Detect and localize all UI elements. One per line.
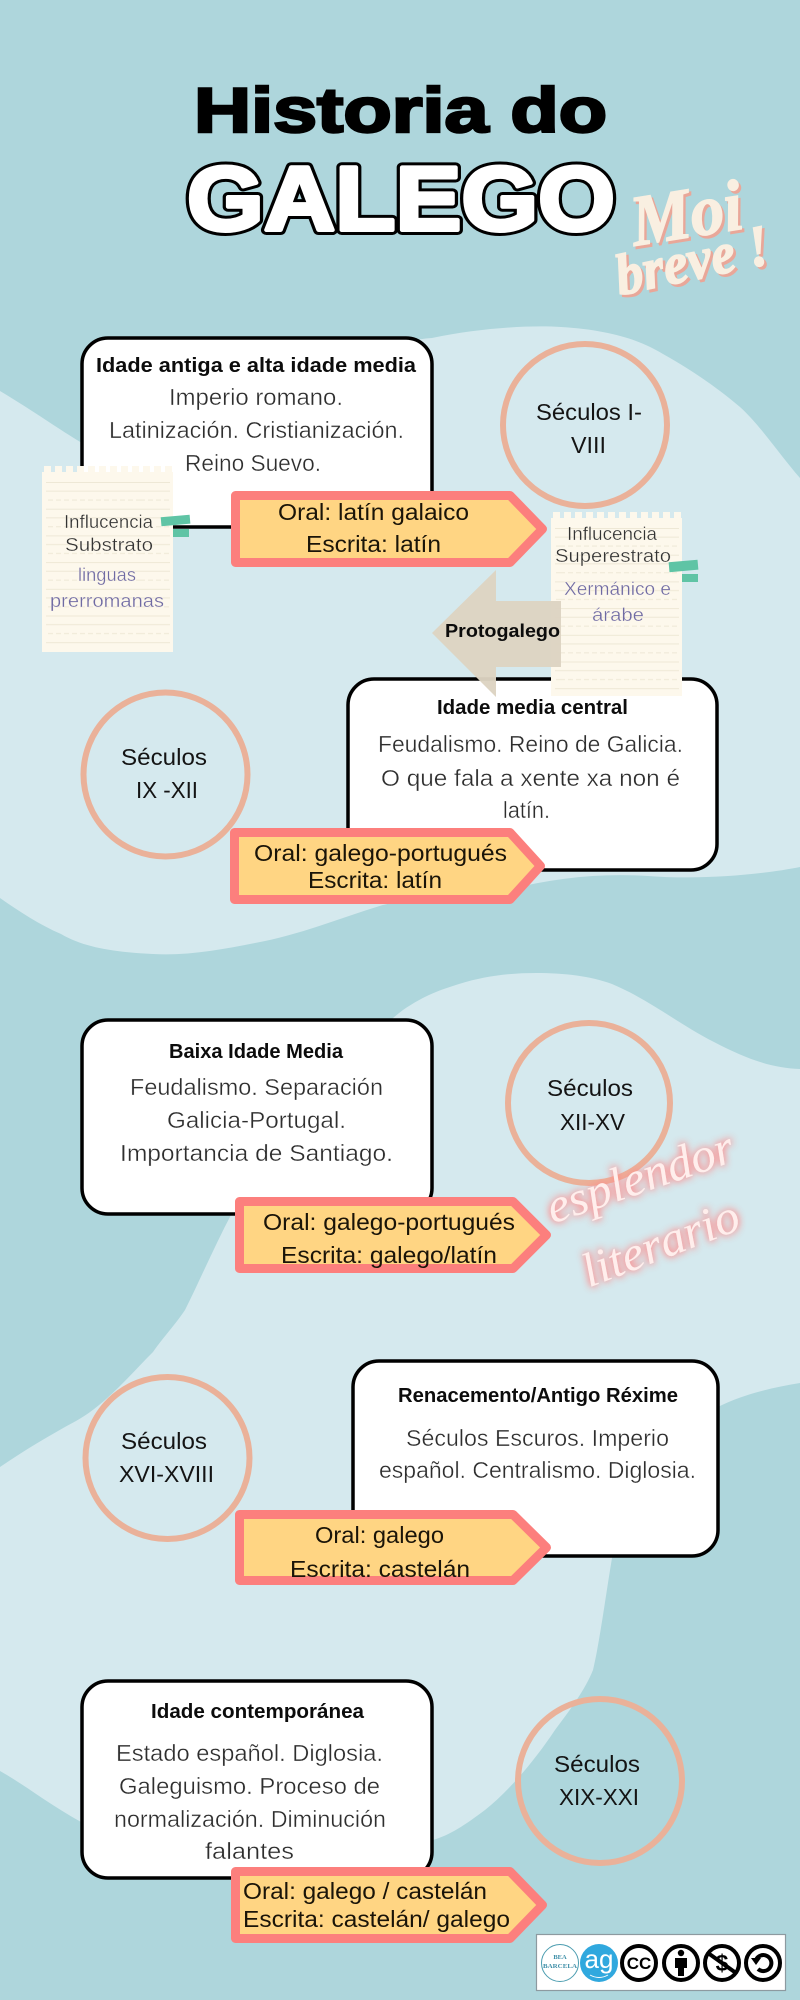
ring (518, 1699, 682, 1863)
ruled lines (555, 528, 679, 694)
arrow: protogalego (432, 570, 561, 697)
icon: Bea Barcelá (542, 1944, 578, 1982)
panel: renacemento (353, 1361, 718, 1556)
arrow text: Oral: galego (315, 1522, 444, 1548)
background blob: lower (0, 973, 800, 1860)
century label: Séculos (554, 1751, 640, 1777)
icon: non commercial: $ (716, 1950, 729, 1976)
icon: Bea Barcelá: BEA (553, 1954, 567, 1961)
torn top edge (553, 512, 682, 520)
body text: falantes (205, 1838, 294, 1864)
body text: Reino Suevo. (185, 450, 321, 476)
arrow: galego / castelán (236, 1872, 542, 1938)
tagline shadow: breve: breve ! (611, 214, 778, 310)
note text: Influcencia (567, 524, 658, 544)
ruled lines (46, 482, 170, 650)
circle: séculos IX-XII (84, 692, 248, 856)
body text: latín. (503, 797, 550, 823)
circle: séculos XIX-XXI (518, 1699, 682, 1863)
title line: GALEGO outline: GALEGO (187, 149, 615, 250)
icon: attribution (664, 1946, 698, 1980)
body text: español. Centralismo. Diglosia. (379, 1457, 696, 1483)
icon: share alike (746, 1946, 780, 1980)
tape (669, 560, 698, 582)
torn top edge (44, 466, 173, 474)
note detail: Xermánico e (564, 579, 671, 599)
century label: XIX-XXI (559, 1784, 639, 1810)
circle: séculos XII-XV (508, 1023, 670, 1183)
body text: Imperio romano. (169, 384, 343, 410)
neon word: literario: literario (574, 1189, 747, 1298)
heading: Baixa Idade Media (169, 1041, 344, 1063)
century label: Séculos (121, 744, 207, 770)
century label: XII-XV (560, 1109, 626, 1135)
body text: Feudalismo. Reino de Galicia. (378, 731, 683, 757)
heading: Idade antiga e alta idade media (96, 355, 417, 377)
arrow text: Escrita: latín (306, 531, 441, 557)
century label: XVI-XVIII (119, 1461, 214, 1487)
ring (86, 1377, 250, 1539)
panel: baixa idade media (82, 1020, 432, 1214)
note text: Influcencia (64, 512, 154, 532)
tape (161, 515, 190, 537)
arrow shape (240, 1202, 546, 1268)
icon: Bea Barcelá: BARCELA (543, 1963, 577, 1970)
panel: idade antiga (82, 338, 432, 527)
arrow: galego, castelán (240, 1514, 546, 1582)
icon: non commercial (705, 1946, 739, 1980)
arrow shape (234, 832, 540, 900)
background blob: upper (0, 326, 800, 954)
card (348, 679, 717, 870)
arrow: latín galaico (236, 496, 542, 562)
ring (508, 1023, 670, 1183)
note: substrato (42, 470, 190, 652)
ring (84, 692, 248, 856)
arrow text: Oral: galego-portugués (263, 1209, 515, 1235)
arrow text: Oral: galego / castelán (243, 1878, 487, 1904)
century label: Séculos (547, 1075, 633, 1101)
tagline shadow: Moi: Moi (626, 168, 750, 264)
circle: séculos I-VIII (503, 344, 667, 506)
arrow text: Escrita: galego/latín (281, 1242, 497, 1268)
tagline: breve: breve ! (609, 212, 775, 308)
badge frame (536, 1934, 786, 1990)
tagline: Moi breve (609, 165, 778, 310)
note: superestrato (551, 516, 698, 696)
century label: IX -XII (136, 777, 198, 803)
panel: idade contemporánea (82, 1681, 432, 1878)
arrow: galego-portugués, galego/latín (240, 1202, 546, 1268)
arrow text: Escrita: latín (308, 867, 442, 893)
body text: Latinización. Cristianización. (109, 417, 404, 443)
licence badge (536, 1934, 786, 1990)
neon label: esplendor literario (539, 1120, 747, 1298)
icon: CC (622, 1946, 656, 1980)
note detail: linguas (78, 565, 136, 585)
body text: Séculos Escuros. Imperio (406, 1425, 669, 1451)
arrow shape (432, 570, 561, 697)
title line: Historia do: Historia do (194, 76, 607, 146)
icon: ag: ag (585, 1944, 613, 1974)
icon: ag (580, 1944, 618, 1982)
body text: Estado español. Diglosia. (116, 1740, 383, 1766)
circle: séculos XVI-XVIII (86, 1377, 250, 1539)
card (82, 1681, 432, 1878)
heading: Idade media central (437, 697, 628, 719)
arrow text: Escrita: castelán/ galego (243, 1906, 510, 1932)
body text: Importancia de Santiago. (120, 1140, 393, 1166)
arrow shape (240, 1514, 546, 1580)
body text: O que fala a xente xa non é (381, 765, 680, 791)
note text: Substrato (65, 535, 153, 555)
arrow label: Protogalego (445, 620, 560, 641)
paper (551, 518, 682, 696)
century label: VIII (571, 432, 606, 458)
icon: CC: CC (627, 1954, 651, 1973)
heading: Renacemento/Antigo Réxime (398, 1385, 678, 1407)
arrow: galego-portugués, latín (234, 832, 540, 900)
arrow shape (236, 496, 542, 562)
title (187, 76, 615, 250)
ring (503, 344, 667, 506)
note text: Superestrato (555, 546, 671, 566)
body text: Galeguismo. Proceso de (119, 1773, 380, 1799)
body text: normalización. Diminución (114, 1806, 386, 1832)
body text: Feudalismo. Separación (130, 1074, 383, 1100)
arrow text: Oral: galego-portugués (254, 840, 507, 866)
card (82, 1020, 432, 1214)
arrow text: Oral: latín galaico (278, 499, 469, 525)
body text: Galicia-Portugal. (167, 1107, 346, 1133)
heading: Idade contemporánea (151, 1701, 365, 1723)
century label: Séculos (121, 1428, 207, 1454)
neon word: esplendor: esplendor (539, 1120, 741, 1234)
note detail: prerromanas (50, 591, 164, 611)
panel: idade media central (348, 679, 717, 870)
card (353, 1361, 718, 1556)
tagline: Moi: Moi (624, 165, 748, 262)
note detail: árabe (592, 605, 644, 625)
arrow text: Escrita: castelán (290, 1556, 470, 1582)
arrow shape (236, 1872, 542, 1938)
century label: Séculos I- (536, 399, 642, 425)
card (82, 338, 432, 527)
title line: GALEGO: GALEGO (187, 149, 615, 250)
paper (42, 472, 173, 652)
